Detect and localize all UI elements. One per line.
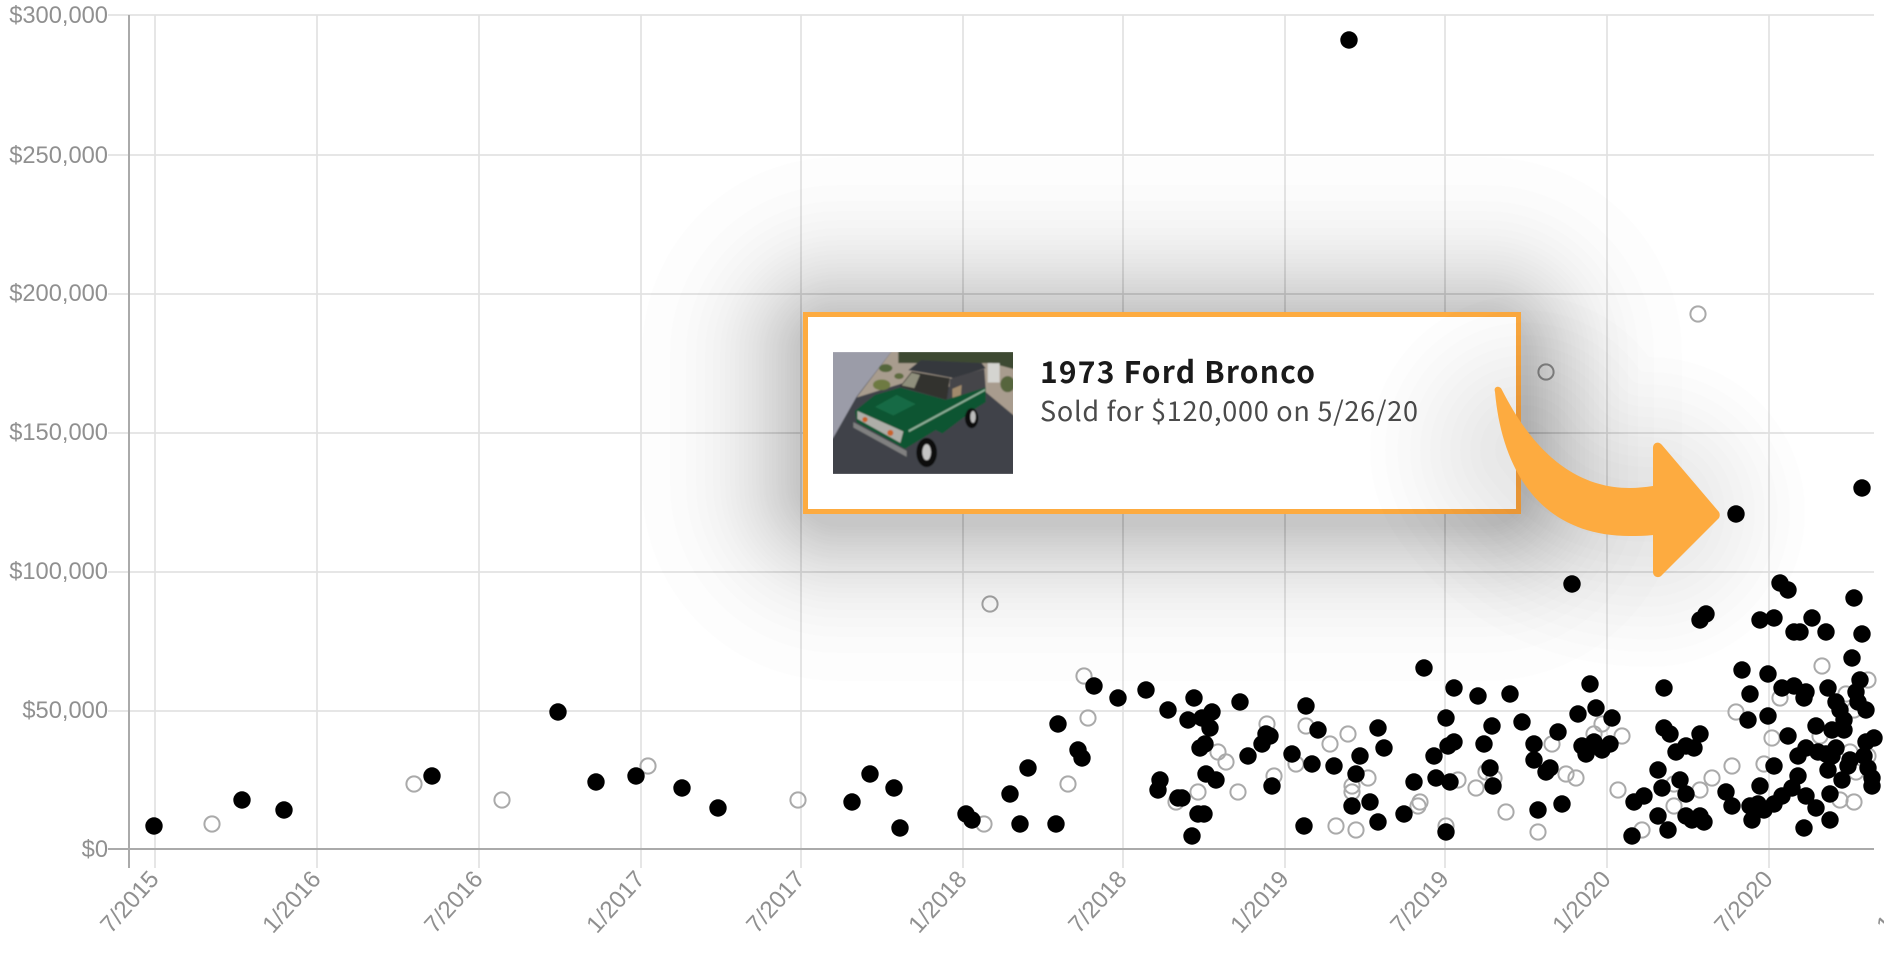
x axis labels: 7/2015 (95, 866, 164, 939)
photo: green Ford Bronco (833, 352, 1013, 474)
y axis labels: $250,000 (9, 143, 108, 169)
x axis labels: 1/2019 (1225, 866, 1294, 939)
filled dots: sold listings (145, 31, 1883, 845)
x axis labels: 1/2016 (257, 866, 326, 939)
y axis labels: $150,000 (9, 420, 108, 446)
card title: 1973 Ford Bronco (1040, 348, 1316, 392)
x axis labels: 1/2017 (581, 866, 650, 939)
open dots: unsold listings (204, 306, 1876, 840)
card subtitle: Sold for $120,000 on 5/26/20 (1040, 390, 1419, 429)
x axis labels: 7/2016 (419, 866, 488, 939)
callout card: 1973 Ford Bronco (803, 312, 1521, 514)
y axis labels: $200,000 (9, 281, 108, 307)
arrow (1495, 387, 1720, 577)
x axis labels (95, 866, 1884, 939)
y axis labels: $0 (82, 837, 108, 863)
x axis labels: 1/2018 (903, 866, 972, 939)
y axis labels: $300,000 (9, 3, 108, 29)
card drop shadow (642, 157, 1682, 681)
x axis labels: 7/2020 (1709, 866, 1778, 939)
y axis labels: $50,000 (22, 698, 108, 724)
x axis labels: 7/2018 (1063, 866, 1132, 939)
x axis labels: 1/2020 (1547, 866, 1616, 939)
arrow drop shadow (1525, 450, 1650, 512)
x axis labels: 7/2017 (741, 866, 810, 939)
y axis labels: $100,000 (9, 559, 108, 585)
x axis labels: 7/2019 (1385, 866, 1454, 939)
y axis labels (9, 3, 108, 863)
